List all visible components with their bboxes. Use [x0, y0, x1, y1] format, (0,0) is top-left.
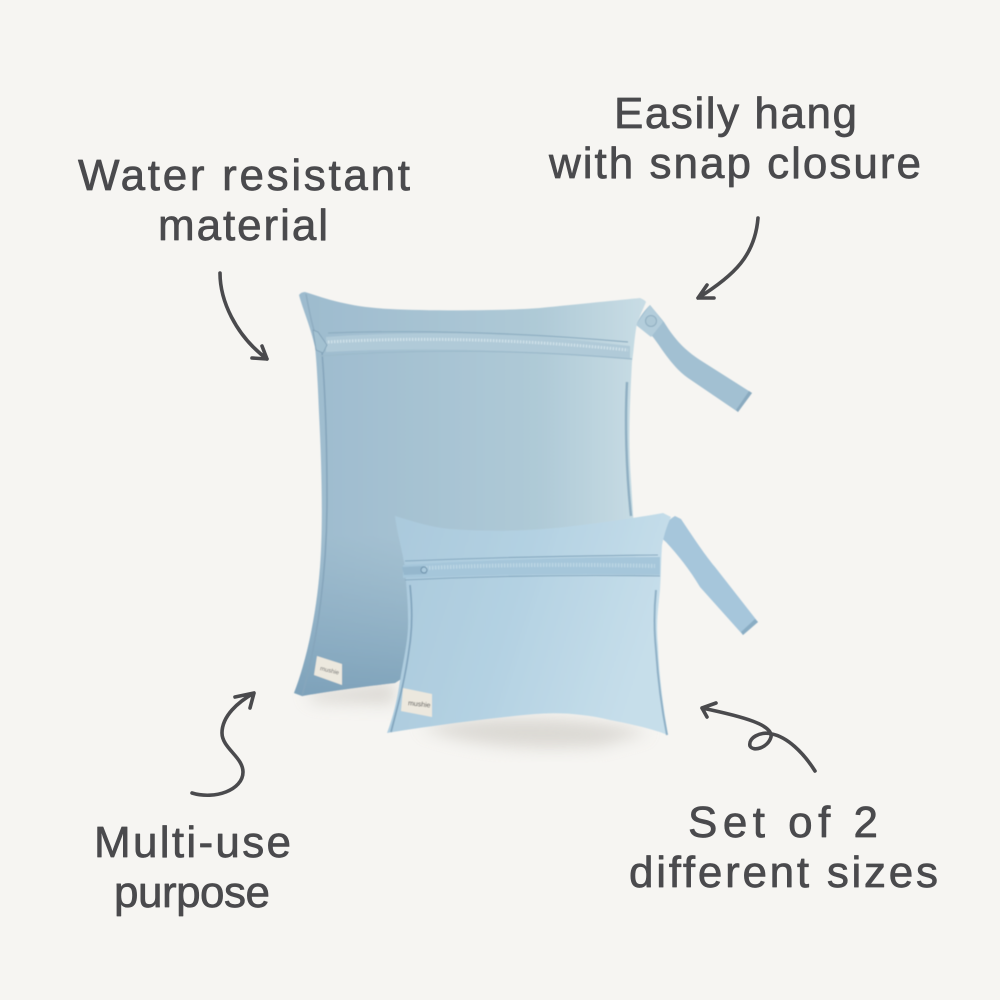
- large bag strap: [636, 305, 752, 412]
- small bag strap: [658, 516, 758, 635]
- callout text: water resistant: [78, 151, 410, 250]
- callout text: snap closure: with snap closure: [548, 139, 921, 188]
- small bag body: [387, 513, 671, 735]
- product photo: two wet bags: [294, 292, 758, 748]
- arrow: to small bag: [702, 703, 815, 771]
- callout text: set of 2: different sizes: [629, 848, 938, 897]
- arrow: to large bag corner: [192, 693, 254, 795]
- large bag zipper: [313, 330, 632, 359]
- small bag zipper: [402, 555, 660, 580]
- callout text: multi-use: [94, 818, 291, 917]
- large bag body: [294, 292, 646, 696]
- arrow: to strap: [698, 218, 758, 298]
- callout text: water resistant: material: [158, 201, 328, 250]
- callout text: multi-use: purpose: [114, 868, 270, 917]
- floor shadows: [305, 682, 650, 748]
- callout text: set of 2: [629, 798, 938, 897]
- large bag label: [314, 656, 342, 685]
- arrow: to large bag side: [220, 273, 267, 359]
- callout text: water resistant: Water resistant: [78, 151, 410, 200]
- callout: snap closure: [548, 89, 921, 298]
- callout text: snap closure: Easily hang: [614, 89, 857, 138]
- callout: multi-use: [94, 693, 291, 917]
- callout text: multi-use: Multi-use: [94, 818, 291, 867]
- small bag label: [401, 688, 432, 717]
- callout: set of 2: [629, 703, 938, 897]
- large bag label: mushie: [319, 666, 340, 677]
- small bag label: mushie: [408, 700, 431, 710]
- callout text: snap closure: [548, 89, 921, 188]
- callout: water resistant: [78, 151, 410, 359]
- callout text: set of 2: Set of 2: [688, 798, 878, 847]
